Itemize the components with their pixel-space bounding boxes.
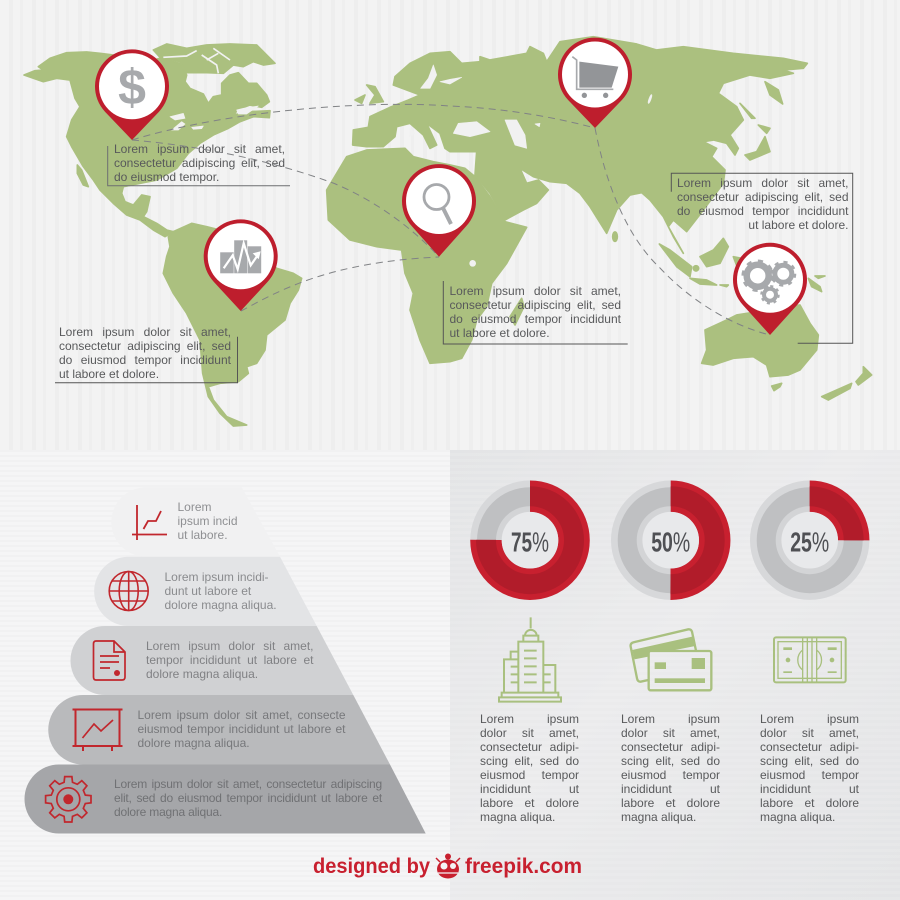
tier 3 <box>70 626 353 695</box>
Eurasia <box>353 37 807 253</box>
pyramid text: tier 4: eiusmod tempor incididunt ut labore et <box>138 722 346 736</box>
column text 2: Lorem ipsum <box>621 712 720 726</box>
text block: North America: consectetur adipiscing elit, sed <box>114 156 285 170</box>
column text 3: dolor sit amet, <box>760 726 859 740</box>
text block: North America: Lorem ipsum dolor sit amet, <box>114 142 285 156</box>
pyramid chart <box>25 487 426 834</box>
frame lines: text box 4 <box>671 173 853 343</box>
frame lines: text box 3 <box>443 281 628 344</box>
column text 2: eiusmod tempor <box>621 768 720 782</box>
footer credit: freepik.com <box>465 855 582 878</box>
icon: banknotes <box>774 637 846 682</box>
pyramid text: tier 1: Lorem <box>178 500 212 514</box>
donut chart: 75%: 75% <box>511 527 549 558</box>
icon: shopping cart <box>572 57 618 98</box>
icon: line chart <box>132 505 167 540</box>
icon: credit cards <box>631 629 711 690</box>
pyramid text: tier 5: dolore magna aliqua. <box>114 805 222 819</box>
column text 2: magna aliqua. <box>621 810 696 824</box>
text block: Asia <box>677 176 848 232</box>
pyramid text: tier 3: tempor incididunt ut labore et <box>146 653 314 667</box>
column text 3: eiusmod tempor <box>760 768 859 782</box>
pyramid text: tier 3: dolore magna aliqua. <box>146 667 258 681</box>
pyramid text: tier 2: dolore magna aliqua. <box>164 598 277 612</box>
Africa <box>327 148 527 363</box>
text block: Asia: consectetur adipiscing elit, sed <box>677 190 848 204</box>
pyramid text: tier 1: ipsum incid <box>178 514 238 528</box>
column text 2: scing elit, sed do <box>621 754 720 768</box>
icon: magnifying glass <box>424 184 451 224</box>
text block: Africa: do eiusmod tempor incididunt <box>450 312 621 326</box>
text block: Asia: Lorem ipsum dolor sit amet, <box>677 176 848 190</box>
pyramid text: tier 5: elit, sed do eiusmod tempor incididunt ut labore et <box>114 791 382 805</box>
pyramid text: tier 2: Lorem ipsum incidi- <box>164 570 269 584</box>
column text 3: labore et dolore <box>760 796 859 810</box>
column text 3: consectetur adipi- <box>760 740 859 754</box>
column text 1: magna aliqua. <box>480 810 555 824</box>
icon: dollar sign: $ <box>118 59 146 115</box>
pyramid text: tier 2 <box>164 570 277 612</box>
pyramid text: tier 4: Lorem ipsum dolor sit amet, consecte <box>138 708 346 722</box>
text block: North America: do eiusmod tempor. <box>114 170 219 184</box>
icon: gears <box>743 261 795 303</box>
frame lines: text box 1 <box>108 146 290 186</box>
icon: building <box>499 617 561 702</box>
tier 1 <box>111 487 280 557</box>
pyramid text: tier 1 <box>178 500 238 542</box>
tier 4 <box>48 695 390 764</box>
Australia <box>702 305 818 377</box>
donut chart: 25% <box>750 480 869 600</box>
text block: Africa: Lorem ipsum dolor sit amet, <box>450 284 621 298</box>
column text 1: incididunt ut <box>480 782 579 796</box>
icon: globe <box>109 572 148 610</box>
frame lines: text box 2 <box>55 337 238 383</box>
column text 3: magna aliqua. <box>760 810 835 824</box>
text block: Africa <box>450 284 621 340</box>
text block: Africa: consectetur adipiscing elit, sed <box>450 298 621 312</box>
text block: North America <box>114 142 285 184</box>
text block: South America: ut labore et dolore. <box>59 367 159 381</box>
icon: gear <box>46 777 91 822</box>
donut chart: 50% <box>611 480 730 600</box>
pyramid text: tier 3: Lorem ipsum dolor sit amet, <box>146 639 314 653</box>
donut chart: 75% <box>470 480 590 600</box>
North America <box>24 52 270 237</box>
column text 2: labore et dolore <box>621 796 720 810</box>
pin: cart <box>558 38 632 128</box>
South America <box>163 223 302 426</box>
icon: presentation board <box>72 710 122 751</box>
icon: document <box>94 641 125 680</box>
pyramid text: tier 5: Lorem ipsum dolor sit amet, consectetur adipiscing <box>114 777 382 791</box>
column text 1: labore et dolore <box>480 796 579 810</box>
column text 1: eiusmod tempor <box>480 768 579 782</box>
Arctic islands <box>153 44 275 73</box>
text block: Asia: ut labore et dolore. <box>748 218 848 232</box>
column text 3 <box>760 712 859 824</box>
tier 5 <box>25 764 426 834</box>
pin: chart <box>204 219 278 311</box>
icon: freepik logo <box>436 854 460 878</box>
donut chart: 25%: 25% <box>790 527 829 558</box>
tier 2 <box>94 557 317 626</box>
world map <box>24 37 872 426</box>
pyramid text: tier 2: dunt ut labore et <box>164 584 251 598</box>
column text 3: Lorem ipsum <box>760 712 859 726</box>
pin: dollar <box>95 49 169 140</box>
column text 1: scing elit, sed do <box>480 754 579 768</box>
pyramid text: tier 4 <box>138 708 346 750</box>
pin: magnifier <box>402 164 476 257</box>
footer credit: designed by <box>313 855 430 878</box>
text block: South America <box>59 325 231 381</box>
pyramid text: tier 1: ut labore. <box>178 528 228 542</box>
donut chart: 50%: 50% <box>651 527 690 558</box>
lower right background panel <box>450 450 900 900</box>
pyramid text: tier 4: dolore magna aliqua. <box>138 736 250 750</box>
text block: South America: consectetur adipiscing elit, sed <box>59 339 231 353</box>
column text 2 <box>621 712 720 824</box>
icon: bar chart with trend arrow <box>220 240 261 273</box>
column text 1: Lorem ipsum <box>480 712 579 726</box>
column text 2: incididunt ut <box>621 782 720 796</box>
map background panel <box>0 0 900 450</box>
text block: Asia: do eiusmod tempor incididunt <box>677 204 848 218</box>
column text 3: scing elit, sed do <box>760 754 859 768</box>
lower left background panel <box>0 450 450 900</box>
footer credit <box>313 854 582 878</box>
column text 3: incididunt ut <box>760 782 859 796</box>
column text 2: dolor sit amet, <box>621 726 720 740</box>
text block: South America: Lorem ipsum dolor sit amet, <box>59 325 231 339</box>
dashed route lines <box>132 104 770 335</box>
column text 1: dolor sit amet, <box>480 726 579 740</box>
pin: gears <box>733 243 807 335</box>
column text 1 <box>480 712 579 824</box>
pyramid text: tier 3 <box>146 639 314 681</box>
text block: Africa: ut labore et dolore. <box>450 326 550 340</box>
column text 2: consectetur adipi- <box>621 740 720 754</box>
pyramid text: tier 5 <box>114 777 382 819</box>
column text 1: consectetur adipi- <box>480 740 579 754</box>
text block: South America: do eiusmod tempor incididunt <box>59 353 231 367</box>
